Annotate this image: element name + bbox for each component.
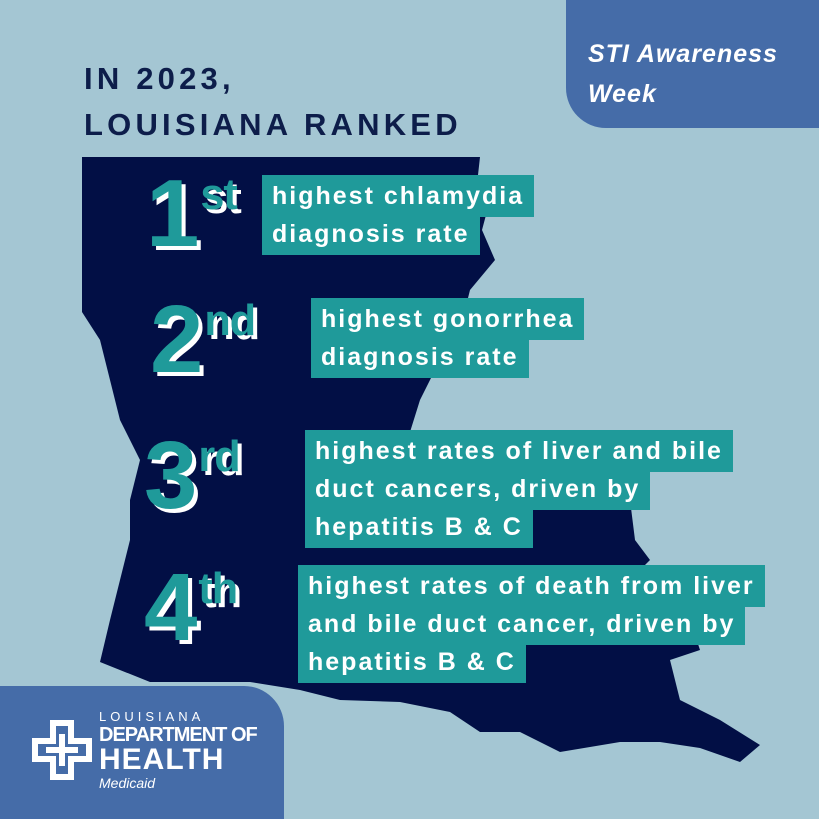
text: rank 3 [305,430,733,548]
text: rank 2: diagnosis rate [321,343,518,371]
text: rank 2: highest gonorrhea [321,305,574,333]
logo text: LOUISIANA [99,709,204,724]
tab: STI Awareness Week [566,0,819,128]
tab: STI Awareness Week: STI Awareness [588,40,778,68]
icon: cross [32,720,92,780]
text: rank 3: highest rates of liver and bile [315,437,723,465]
text: rank 3: hepatitis B & C [315,513,523,541]
text: rank 4 [298,565,765,683]
tab: STI Awareness Week: Week [588,80,657,108]
text: rank 4: and bile duct cancer, driven by [308,610,735,638]
title: IN 2023, [84,61,235,96]
text: rank 1 [262,175,534,255]
text: rank 4: highest rates of death from liver [308,572,755,600]
logo text [99,709,257,791]
title [84,61,462,142]
logo text: HEALTH [99,743,224,776]
logo panel [0,686,284,819]
logo text: DEPARTMENT OF [99,724,257,746]
title: LOUISIANA RANKED [84,107,462,142]
text: rank 1: highest chlamydia [272,182,524,210]
logo text: Medicaid [99,775,155,791]
rank 3: 3rd [144,422,240,529]
rank 2: 2nd [150,286,255,393]
rank 4: 4th [144,554,237,661]
text: rank 4: hepatitis B & C [308,648,516,676]
text: rank 1: diagnosis rate [272,220,470,248]
rank 1: 1st [146,160,237,267]
text: rank 2 [311,298,584,378]
text: rank 3: duct cancers, driven by [315,475,640,503]
